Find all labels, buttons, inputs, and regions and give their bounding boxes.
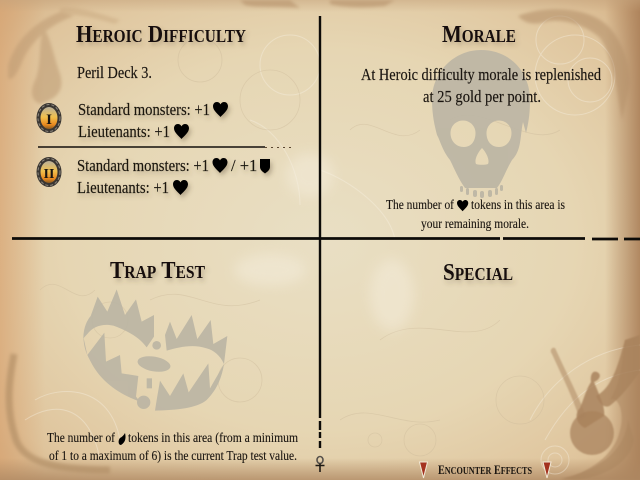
- icon: act II badge: [36, 157, 62, 187]
- text: act I lieutenants: Lieutenants: +1: [78, 122, 170, 141]
- icon: act II badge: II: [44, 167, 54, 182]
- text: act II lieutenants: Lieutenants: +1: [77, 178, 169, 197]
- icon: bear trap watermark: [83, 289, 227, 411]
- panel: special: [420, 260, 551, 478]
- heading: morale: MORALE: [442, 22, 516, 48]
- divider: vertical line: [319, 16, 321, 448]
- text: trap tokens: The number of: [47, 430, 115, 445]
- heading: trap test: TRAP TEST: [110, 258, 205, 284]
- icon: act I badge: I: [46, 112, 52, 128]
- footer: encounter effects: [420, 462, 551, 478]
- text: morale tokens: [386, 197, 565, 231]
- icon: left red marker: [420, 462, 428, 478]
- icon: act I badge: [36, 103, 62, 133]
- heading: heroic difficulty: HEROIC DIFFICULTY: [76, 22, 246, 48]
- icon: ankh: [316, 456, 324, 472]
- text: morale tokens: your remaining morale.: [421, 216, 529, 231]
- text: morale replenish: [361, 65, 602, 106]
- icon: right red marker: [543, 462, 551, 478]
- text: act II standard monsters: / +1: [231, 156, 257, 175]
- text: morale tokens: The number of: [386, 197, 454, 212]
- text: trap tokens: [47, 430, 298, 463]
- panel: heroic difficulty: [36, 22, 292, 197]
- decoration: lower-left ornament: [9, 354, 110, 470]
- decoration: top-left figure silhouette: [8, 8, 120, 104]
- divider: horizontal line: [12, 237, 640, 240]
- text: morale replenish: at 25 gold per point.: [423, 87, 541, 106]
- panel: morale: [361, 22, 602, 231]
- text: morale replenish: At Heroic difficulty morale is replenished: [361, 65, 602, 84]
- text: act I standard monsters: Standard monsters: +1: [78, 100, 210, 119]
- panel: trap test: [47, 258, 298, 463]
- text: peril deck: Peril Deck 3.: [77, 63, 152, 82]
- label: encounter effects: ENCOUNTER EFFECTS: [438, 462, 532, 477]
- text: trap tokens: of 1 to a maximum of 6) is the current Trap test value.: [49, 448, 297, 463]
- heading: special: SPECIAL: [443, 260, 513, 286]
- text: act II standard monsters: Standard monsters: +1: [77, 156, 209, 175]
- text: morale tokens: tokens in this area is: [471, 197, 565, 212]
- decoration: top ornaments: [240, 0, 630, 120]
- icon: skull watermark: [432, 50, 530, 198]
- text: trap tokens: tokens in this area (from a minimum: [128, 430, 298, 445]
- decoration: lower-right rider silhouette: [551, 335, 640, 480]
